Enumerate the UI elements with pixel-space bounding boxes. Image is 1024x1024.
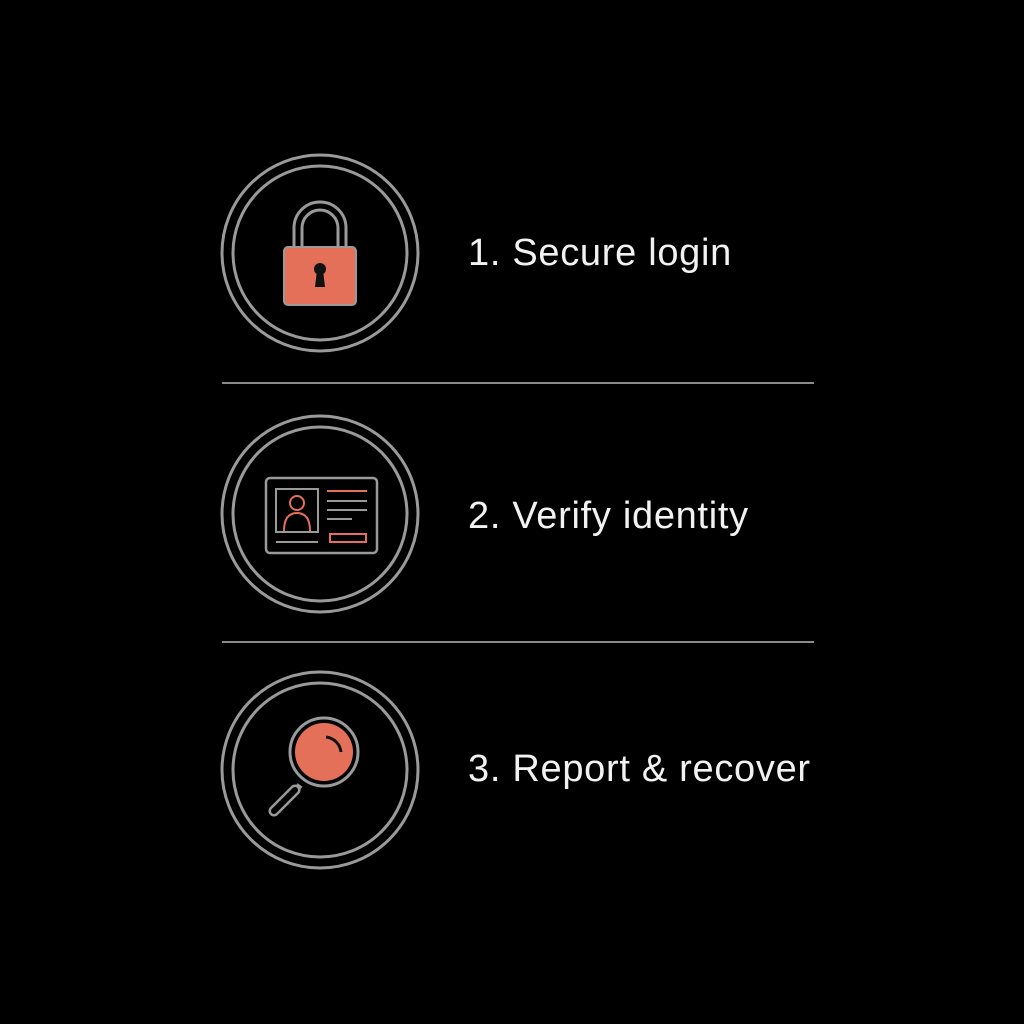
icon: magnifier	[222, 672, 418, 868]
text: step 3: 3. Report & recover	[468, 748, 811, 790]
text: step 1: 1. Secure login	[468, 232, 732, 274]
icon: id card	[222, 416, 418, 612]
divider	[222, 641, 814, 643]
icon: lock	[222, 155, 418, 351]
divider	[222, 382, 814, 384]
text: step 2: 2. Verify identity	[468, 495, 749, 537]
